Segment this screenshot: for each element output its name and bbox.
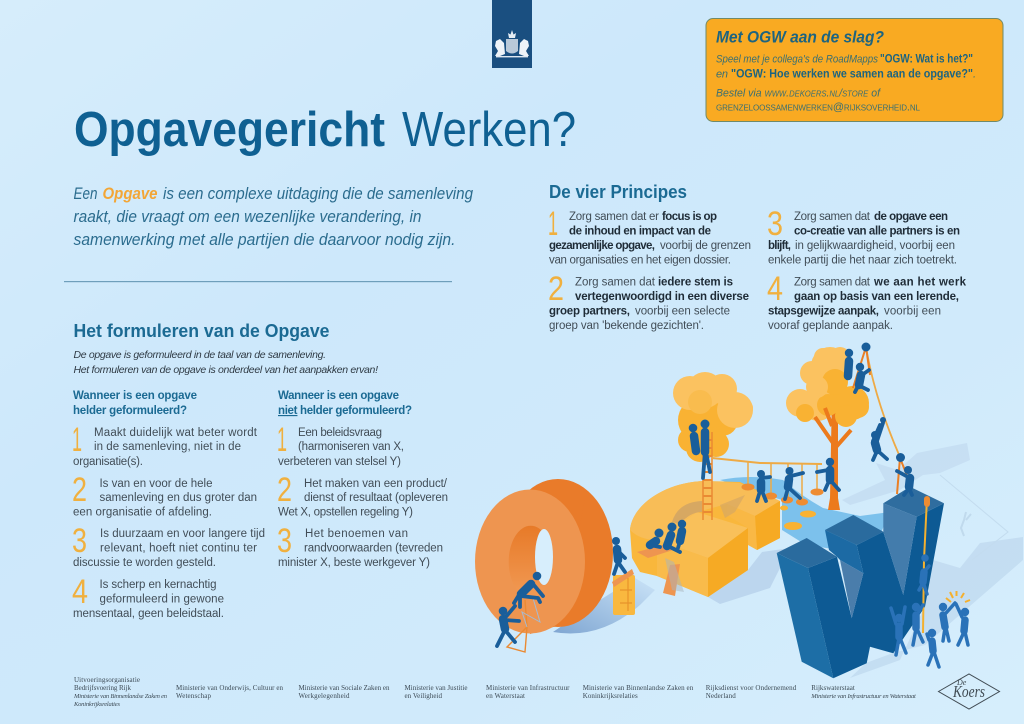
principles 3 and 4: co-creatie van alle partners is en bbox=[794, 226, 960, 238]
heading: De vier Principes: De vier Principes bbox=[549, 182, 687, 202]
intro text bbox=[74, 184, 473, 249]
principles 3 and 4: stapsgewijze aanpak, bbox=[768, 306, 879, 318]
principles 3 and 4: we aan het werk bbox=[873, 276, 967, 288]
column: niet helder geformuleerd: randvoorwaarden (tevreden bbox=[304, 542, 443, 554]
column: niet helder geformuleerd: 2 bbox=[277, 471, 292, 509]
column: helder geformuleerd: geformuleerd in gewone bbox=[100, 594, 224, 606]
rope bridge bbox=[712, 458, 824, 530]
ladder at O bbox=[507, 598, 540, 652]
person walking at O bbox=[497, 606, 519, 646]
logo: De Koers: De bbox=[956, 678, 967, 687]
column: niet helder geformuleerd: 3 bbox=[277, 522, 292, 560]
logo: De Koers bbox=[938, 674, 1000, 709]
column: helder geformuleerd: relevant, hoeft niet continu ter bbox=[100, 542, 257, 554]
footer: organisations: Ministerie van Sociale Zaken en bbox=[298, 684, 390, 692]
long rope between tree and W bbox=[866, 347, 900, 457]
illustration: OGW letters with people bbox=[475, 342, 1023, 678]
callout: Met OGW aan de slag bbox=[706, 18, 1003, 122]
column: niet helder geformuleerd: dienst of resultaat (opleveren bbox=[304, 492, 448, 504]
title bbox=[74, 103, 576, 157]
principles 1 and 2: voorbij de grenzen bbox=[660, 240, 751, 252]
title: Opgavegericht bbox=[74, 103, 385, 157]
title: Werken? bbox=[402, 103, 576, 157]
person climbing into O bbox=[514, 572, 543, 607]
intro text: samenwerking met alle partijen die daarvoor nodig zijn. bbox=[74, 230, 456, 249]
column: niet helder geformuleerd: niet helder geformuleerd? bbox=[278, 405, 412, 417]
planks bbox=[637, 545, 684, 596]
left tree bbox=[673, 372, 753, 462]
intro text: Een bbox=[74, 184, 98, 203]
callout: Met OGW aan de slag: Met OGW aan de slag? bbox=[716, 28, 885, 46]
principles 1 and 2: focus is op bbox=[662, 211, 717, 223]
climber on W bbox=[919, 554, 929, 594]
water bbox=[720, 477, 890, 550]
column: niet helder geformuleerd: (harmoniseren van X, bbox=[298, 441, 404, 453]
principles 3 and 4 bbox=[767, 205, 967, 332]
footer: organisations: Ministerie van Infrastructuur bbox=[486, 684, 570, 692]
principles 1 and 2: 2 bbox=[548, 270, 564, 308]
person on stack bbox=[612, 537, 625, 574]
footer: organisations: Ministerie van Onderwijs, Cultuur en bbox=[176, 684, 284, 692]
column: niet helder geformuleerd: Een beleidsvraag bbox=[298, 427, 382, 439]
footer: organisations: Ministerie van Binnenlandse Zaken en bbox=[583, 684, 694, 692]
column: helder geformuleerd: 1 bbox=[72, 421, 82, 459]
principles 3 and 4: de opgave een bbox=[874, 211, 948, 223]
column: helder geformuleerd: Is van en voor de hele bbox=[100, 478, 212, 490]
footer: organisations: en Waterstaat bbox=[486, 692, 525, 700]
column: helder geformuleerd: Is duurzaam en voor langere tijd bbox=[100, 528, 265, 540]
principles 1 and 2: Zorg samen dat bbox=[575, 276, 656, 288]
callout: Met OGW aan de slag: grenzeloossamenwerken@rijksoverheid.nl bbox=[716, 102, 921, 114]
column: helder geformuleerd: 3 bbox=[72, 522, 87, 560]
principles 3 and 4: Zorg samen dat bbox=[794, 211, 871, 223]
column: niet helder geformuleerd: Het maken van een product/ bbox=[304, 478, 448, 490]
logo: De Koers: Koers bbox=[952, 682, 985, 701]
principles 1 and 2 bbox=[548, 205, 751, 332]
column: helder geformuleerd: in de samenleving, niet in de bbox=[94, 441, 241, 453]
callout: Met OGW aan de slag: en bbox=[716, 68, 728, 80]
right tree bbox=[786, 347, 869, 510]
principles 3 and 4: enkele partij die het naar zich toetrekt. bbox=[768, 254, 957, 266]
ladder on left tree bbox=[703, 432, 712, 520]
footer: organisations bbox=[73, 676, 916, 708]
callout: Met OGW aan de slag: Speel met je collega's de RoadMapps bbox=[716, 54, 878, 66]
letter W bbox=[777, 487, 944, 678]
people on ladder in left tree bbox=[689, 420, 710, 478]
principles 1 and 2: Zorg samen dat er bbox=[569, 211, 659, 223]
footer: organisations: Ministerie van Justitie bbox=[404, 684, 468, 692]
principles 1 and 2: iedere stem is bbox=[658, 276, 733, 288]
letter O bbox=[475, 479, 613, 634]
callout: Met OGW aan de slag: "OGW: Wat is het?" bbox=[880, 54, 973, 66]
column: helder geformuleerd: 2 bbox=[72, 471, 87, 509]
principles 1 and 2: gezamenlijke opgave, bbox=[549, 240, 655, 252]
column: helder geformuleerd: Is scherp en kernachtig bbox=[100, 579, 216, 591]
column: helder geformuleerd: organisatie(s). bbox=[73, 456, 143, 468]
principles 3 and 4: 3 bbox=[767, 205, 783, 243]
principles 3 and 4: 4 bbox=[767, 270, 783, 308]
stack of boxes bbox=[612, 569, 635, 615]
principles 1 and 2: de inhoud en impact van de bbox=[569, 226, 711, 238]
person hanging from rope bbox=[871, 423, 887, 460]
logo: Rijksoverheid coat of arms bbox=[492, 0, 532, 68]
column: helder geformuleerd: mensentaal, geen beleidstaal. bbox=[73, 608, 224, 620]
heading: Het formuleren van de Opgave: Het formuleren van de Opgave bbox=[74, 321, 330, 341]
callout: Met OGW aan de slag: "OGW: Hoe werken we samen aan de opgave?" bbox=[731, 68, 973, 80]
column: niet helder geformuleerd: 1 bbox=[277, 421, 287, 459]
footer: organisations: Uitvoeringsorganisatie bbox=[74, 676, 140, 684]
callout: Met OGW aan de slag: Bestel via www.dekoers.nl/store of bbox=[716, 88, 881, 100]
footer: organisations: en Veiligheid bbox=[404, 692, 442, 700]
principles 3 and 4: vooraf geplande aanpak. bbox=[768, 320, 893, 332]
footer: organisations: Rijkswaterstaat bbox=[811, 684, 855, 692]
column: helder geformuleerd: een organisatie of afdeling. bbox=[73, 506, 212, 518]
intro text: Opgave bbox=[102, 184, 158, 203]
sparkle above high five bbox=[946, 591, 970, 602]
footer: organisations: Koninkrijksrelaties bbox=[73, 701, 120, 708]
rope on W with climber bbox=[923, 496, 930, 633]
column: helder geformuleerd: samenleving en dus groter dan bbox=[100, 492, 257, 504]
column: helder geformuleerd bbox=[72, 390, 265, 620]
callout: Met OGW aan de slag: . bbox=[973, 68, 976, 80]
principles 3 and 4: Zorg samen dat bbox=[794, 276, 871, 288]
footer: organisations: Nederland bbox=[706, 692, 736, 700]
footer: organisations: Ministerie van Binnenlandse Zaken en bbox=[73, 693, 167, 700]
column: helder geformuleerd: 4 bbox=[72, 573, 88, 611]
people on bridge bbox=[757, 458, 839, 501]
principles 3 and 4: blijft, bbox=[768, 240, 791, 252]
column: helder geformuleerd: helder geformuleerd? bbox=[73, 405, 187, 417]
column: niet helder geformuleerd: Het benoemen van bbox=[305, 528, 408, 540]
principles 1 and 2: voorbij een selecte bbox=[635, 306, 730, 318]
letter G bbox=[630, 481, 780, 597]
column: niet helder geformuleerd: Wet X, opstellen regeling Y) bbox=[278, 506, 413, 518]
column: helder geformuleerd: Maakt duidelijk wat beter wordt bbox=[94, 427, 258, 439]
principles 1 and 2: groep van 'bekende gezichten'. bbox=[549, 320, 704, 332]
ladders to pulleys bbox=[853, 342, 912, 494]
column: niet helder geformuleerd: minister X, beste werkgever Y) bbox=[278, 557, 430, 569]
column: niet helder geformuleerd bbox=[277, 390, 448, 569]
intro text: is een complexe uitdaging die de samenleving bbox=[163, 184, 473, 203]
principles 3 and 4: in gelijkwaardigheid, voorbij een bbox=[795, 240, 955, 252]
footer: organisations: Bedrijfsvoering Rijk bbox=[74, 684, 132, 692]
footer: organisations: Ministerie van Infrastructuur en Waterstaat bbox=[810, 693, 916, 700]
subtitle text: Het formuleren van de opgave is onderdeel van het aanpakken ervan! bbox=[74, 364, 378, 376]
subtitle text bbox=[74, 349, 378, 376]
column: niet helder geformuleerd: Wanneer is een opgave bbox=[278, 390, 399, 402]
footer: organisations: Werkgelegenheid bbox=[298, 692, 350, 700]
subtitle text: De opgave is geformuleerd in de taal van de samenleving. bbox=[74, 349, 326, 361]
column: niet helder geformuleerd: verbeteren van stelsel Y) bbox=[278, 456, 401, 468]
group of people on G bbox=[650, 520, 686, 552]
footer: organisations: Rijksdienst voor Ondernemend bbox=[706, 684, 797, 692]
people celebrating bbox=[891, 603, 969, 667]
principles 1 and 2: groep partners, bbox=[549, 306, 630, 318]
principles 3 and 4: voorbij een bbox=[884, 306, 941, 318]
person on top of W bbox=[897, 466, 912, 495]
footer: organisations: Koninkrijksrelaties bbox=[583, 692, 638, 700]
intro text: raakt, die vraagt om een wezenlijke verandering, in bbox=[74, 207, 422, 226]
shadows on the ground bbox=[553, 443, 1023, 678]
column: helder geformuleerd: Wanneer is een opgave bbox=[73, 390, 197, 402]
principles 1 and 2: van organisaties en het eigen dossier. bbox=[549, 254, 731, 266]
column: helder geformuleerd: discussie te worden gesteld. bbox=[73, 557, 216, 569]
principles 1 and 2: vertegenwoordigd in een diverse bbox=[575, 291, 749, 303]
principles 3 and 4: gaan op basis van een lerende, bbox=[794, 291, 959, 303]
people in right tree bbox=[845, 349, 869, 392]
footer: organisations: Wetenschap bbox=[176, 692, 212, 700]
principles 1 and 2: 1 bbox=[548, 205, 558, 243]
